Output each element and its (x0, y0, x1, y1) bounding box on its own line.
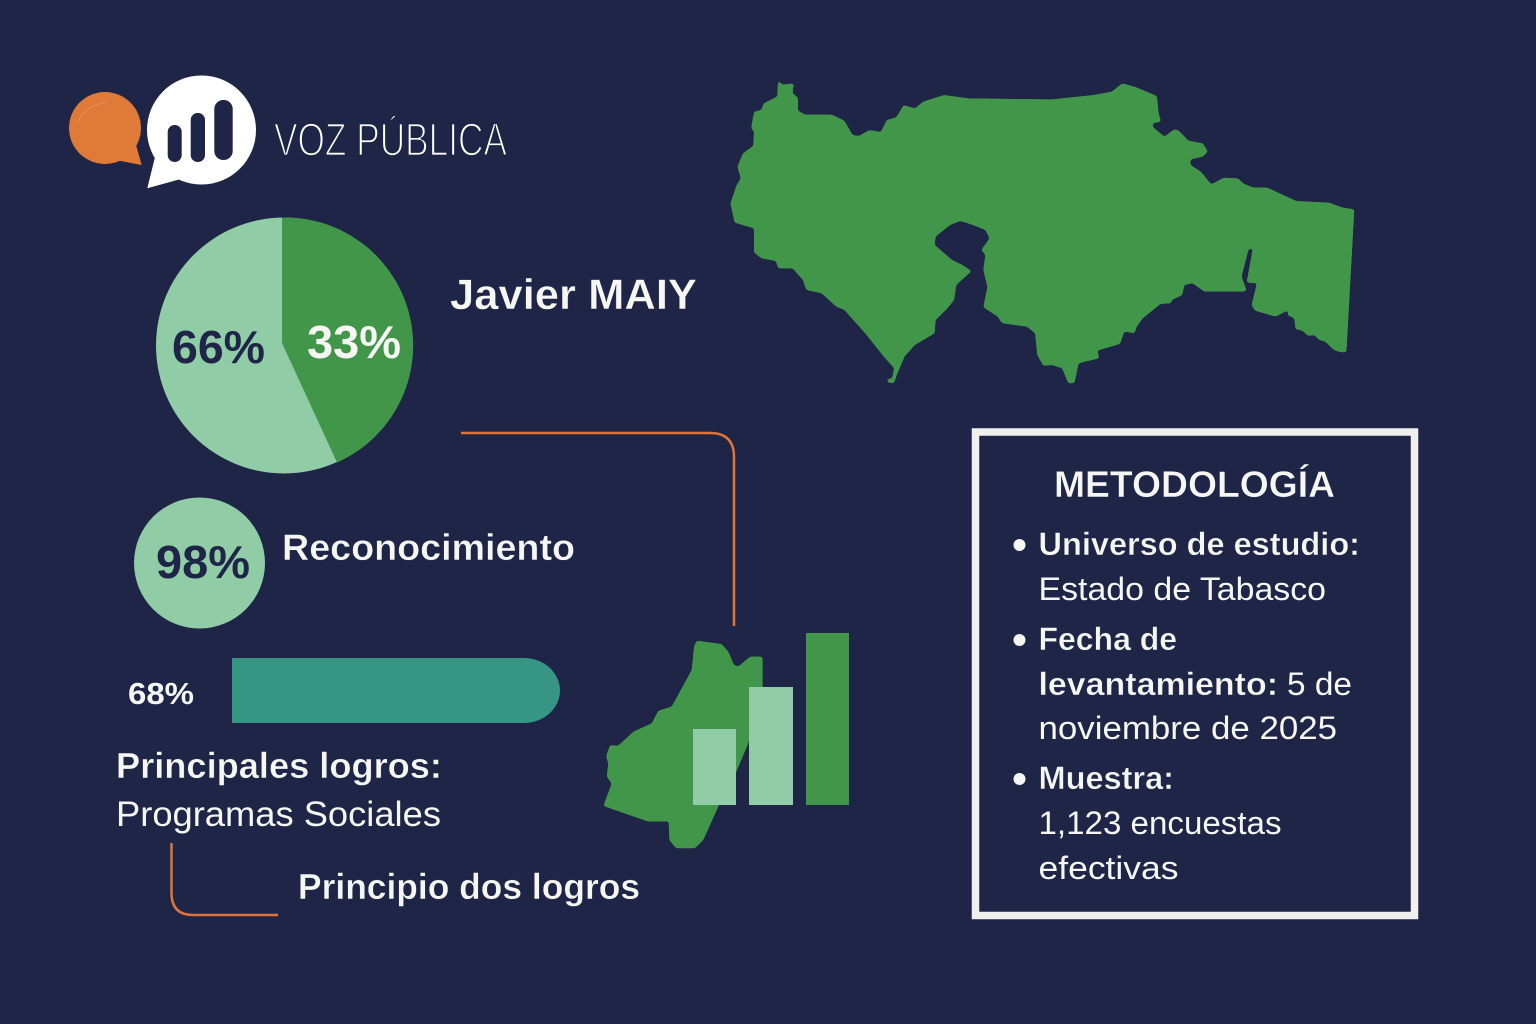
chart: small map with bars (603, 633, 849, 848)
heading: Principales logros: Principales logros: (116, 745, 442, 786)
list item: fecha: 5 de (1287, 666, 1352, 702)
list item: muestra: efectivas (1038, 850, 1178, 886)
panel frame (976, 432, 1414, 916)
bar value: 68% (128, 676, 194, 711)
list item: fecha (1014, 621, 1352, 746)
logo: Voz Pública (69, 76, 507, 188)
bar shape (232, 658, 560, 723)
progress bar 68% (128, 658, 560, 723)
candidate name: Javier MAIY (450, 271, 697, 319)
bar 3 (806, 633, 849, 805)
pie label 66%: 66% (172, 321, 265, 373)
list item: fecha: Fecha de (1038, 621, 1177, 657)
icon: orange speech bubble (69, 92, 142, 165)
logo wordmark: VOZ PÚBLICA (274, 114, 507, 166)
list item: fecha: levantamiento: (1038, 666, 1278, 702)
list item: universo: Estado de Tabasco (1038, 571, 1326, 607)
text: Programas Sociales: Programas Sociales (116, 795, 441, 834)
icon: map silhouette (603, 641, 763, 848)
list item: muestra: 1,123 encuestas (1038, 805, 1282, 841)
list item: universo (1014, 526, 1360, 607)
bar 2 (749, 687, 793, 805)
arrow: connector to Principio dos logros (172, 843, 278, 915)
pie chart: 66% / 33% (156, 217, 413, 474)
recognition value: 98% (156, 536, 250, 588)
recognition circle 98% (134, 498, 265, 628)
bar 1 (693, 729, 736, 805)
list item: muestra: Muestra: (1038, 760, 1174, 796)
text: Principio dos logros: Principio dos logros (298, 866, 640, 907)
icon: white speech bubble with bars (147, 76, 256, 188)
pie label 33%: 33% (307, 316, 401, 368)
panel: metodología (976, 432, 1414, 916)
list item: universo: Universo de estudio: (1038, 526, 1360, 562)
list item: fecha: noviembre de 2025 (1038, 710, 1337, 746)
text block: principales logros (116, 745, 442, 834)
heading: Reconocimiento: Reconocimiento (282, 527, 575, 568)
arrow: connector from name to bar chart (461, 433, 734, 626)
list item: muestra (1014, 760, 1282, 886)
map: Tabasco state (730, 80, 1354, 383)
panel heading: METODOLOGÍA (1054, 464, 1335, 505)
